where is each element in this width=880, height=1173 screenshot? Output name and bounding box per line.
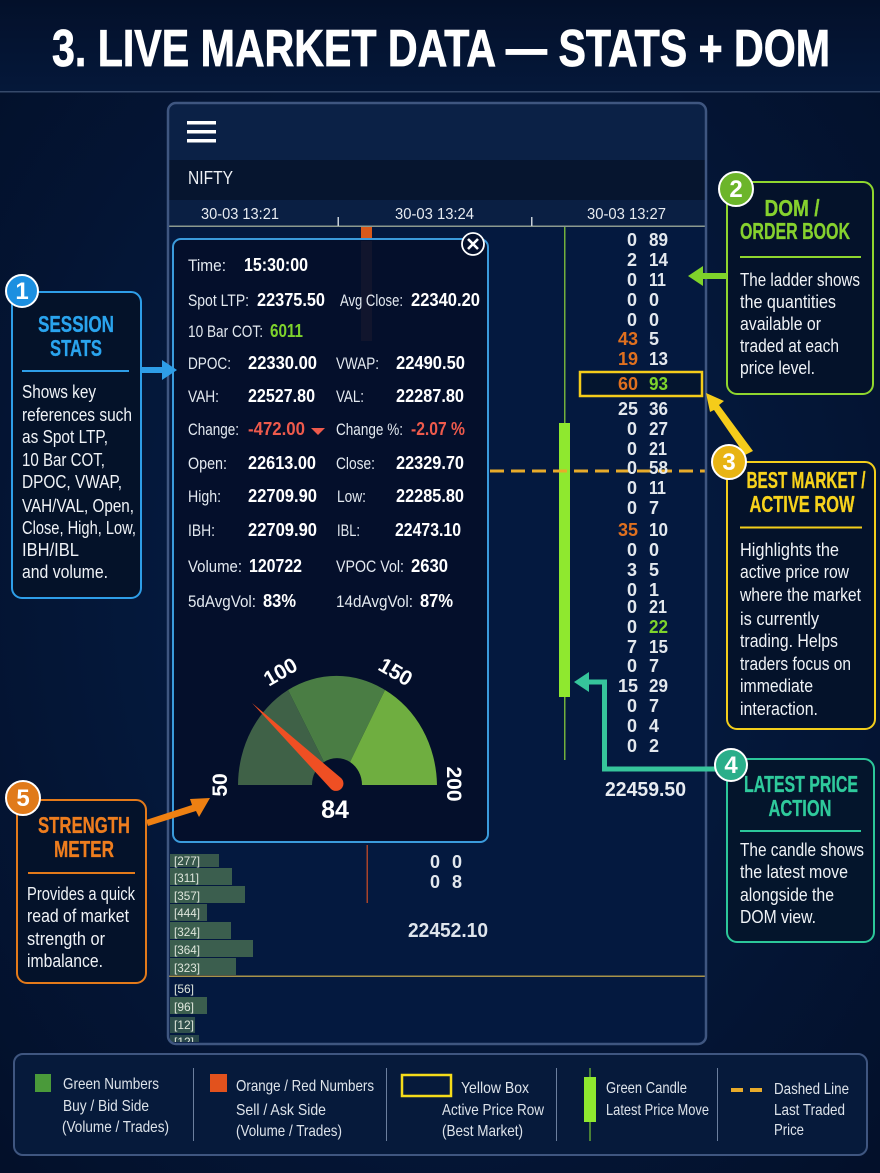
stat rows: Volume: bbox=[188, 557, 242, 576]
lower DOM rows: 0 bbox=[430, 872, 440, 892]
volume bars: [357] bbox=[174, 889, 200, 903]
stat rows: 22375.50 bbox=[257, 290, 325, 310]
body text: is currently bbox=[740, 609, 819, 629]
stat rows: Open: bbox=[188, 454, 227, 473]
needle bbox=[252, 703, 343, 791]
legend: green numbers bbox=[35, 1074, 169, 1136]
callout 3: best market bbox=[727, 462, 875, 729]
DOM ladder: 7 bbox=[649, 696, 659, 716]
DOM ladder: 21 bbox=[649, 597, 667, 617]
body text: Shows key bbox=[22, 382, 96, 402]
DOM ladder: 60 bbox=[618, 374, 638, 394]
DOM ladder: 14 bbox=[649, 250, 668, 270]
gauge labels: 150 bbox=[374, 654, 416, 691]
DOM ladder: 58 bbox=[649, 458, 668, 478]
badge 3: 3 bbox=[722, 449, 736, 476]
DOM ladder: 22 bbox=[649, 617, 668, 637]
DOM ladder: 4 bbox=[649, 716, 659, 736]
volume bars: [323] bbox=[174, 961, 200, 975]
time axis bbox=[169, 200, 705, 227]
stat rows: Change %: bbox=[336, 420, 403, 439]
body text bbox=[740, 840, 864, 927]
body text: imbalance. bbox=[27, 951, 103, 971]
DOM ladder: 3 bbox=[627, 560, 637, 580]
stat rows: 22527.80 bbox=[248, 386, 315, 406]
callout 2: DOM order book bbox=[719, 172, 873, 394]
heading: SESSION bbox=[38, 311, 114, 337]
DOM ladder: 0 bbox=[627, 439, 637, 459]
legend: green numbers: Green Numbers bbox=[63, 1076, 159, 1093]
DOM ladder: 15 bbox=[649, 637, 668, 657]
body text: Provides a quick bbox=[27, 884, 136, 904]
body text: Highlights the bbox=[740, 540, 839, 560]
DOM ladder: 0 bbox=[649, 310, 659, 330]
legend: orange numbers: Orange / Red Numbers bbox=[236, 1078, 374, 1095]
body text: immediate bbox=[740, 676, 813, 696]
DOM ladder: 5 bbox=[649, 560, 659, 580]
DOM ladder: 0 bbox=[627, 478, 637, 498]
legend panel bbox=[14, 1054, 867, 1155]
stat rows: 83% bbox=[263, 591, 296, 611]
legend: dashed line bbox=[731, 1081, 849, 1139]
body text: traders focus on bbox=[740, 654, 851, 674]
callout 1: session stats bbox=[6, 275, 141, 598]
app header bar bbox=[169, 104, 705, 160]
heading bbox=[746, 467, 866, 517]
stat rows: 22285.80 bbox=[396, 486, 464, 506]
DOM ladder: 0 bbox=[627, 540, 637, 560]
badge 5 bbox=[6, 781, 40, 815]
legend: green numbers: (Volume / Trades) bbox=[62, 1119, 169, 1136]
body text: and volume. bbox=[22, 562, 108, 582]
stat rows: 120722 bbox=[249, 556, 302, 576]
stat rows: 22329.70 bbox=[396, 453, 464, 473]
stat rows: -2.07 % bbox=[411, 419, 465, 439]
volume bars: [56] bbox=[174, 982, 194, 996]
body text: The ladder shows bbox=[740, 270, 860, 290]
legend: orange numbers: Sell / Ask Side bbox=[236, 1102, 326, 1119]
lower price: 22452.10 bbox=[408, 920, 488, 942]
body text: price level. bbox=[740, 358, 815, 378]
badge 1: 1 bbox=[15, 278, 29, 305]
stat rows: 22709.90 bbox=[248, 520, 317, 540]
DOM ladder: 0 bbox=[627, 656, 637, 676]
legend: green candle: Green Candle bbox=[606, 1080, 687, 1097]
body text: trading. Helps bbox=[740, 631, 838, 651]
badge 4: 4 bbox=[724, 752, 738, 779]
volume bars: [311] bbox=[174, 871, 199, 885]
badge 2 bbox=[719, 172, 753, 206]
gauge labels: 100 bbox=[260, 654, 302, 691]
body text: VAH/VAL, Open, bbox=[22, 496, 134, 516]
panel: session stats popup bbox=[173, 233, 488, 842]
lower DOM rows: 0 bbox=[430, 852, 440, 872]
panel: app window bbox=[168, 103, 706, 1049]
icon: hamburger menu bbox=[187, 121, 216, 142]
volume bars bbox=[170, 854, 253, 1049]
stat rows: 2630 bbox=[411, 556, 448, 576]
legend: yellow box: Yellow Box bbox=[461, 1080, 529, 1097]
lower DOM rows: 0 bbox=[452, 852, 462, 872]
DOM ladder: 27 bbox=[649, 419, 668, 439]
badge 5: 5 bbox=[16, 785, 30, 812]
stat rows: Low: bbox=[337, 487, 366, 506]
body text: strength or bbox=[27, 929, 105, 949]
DOM ladder: 7 bbox=[649, 498, 659, 518]
body text: the latest move bbox=[740, 862, 848, 882]
callout 5: strength meter bbox=[6, 781, 146, 983]
DOM ladder: 2 bbox=[627, 250, 637, 270]
DOM ladder: 0 bbox=[627, 736, 637, 756]
gauge value: 84 bbox=[321, 796, 349, 824]
badge 1 bbox=[6, 275, 38, 307]
DOM ladder: 21 bbox=[649, 439, 667, 459]
DOM ladder: 89 bbox=[649, 230, 668, 250]
gauge labels bbox=[209, 654, 465, 802]
DOM ladder: 7 bbox=[627, 637, 637, 657]
DOM ladder: 10 bbox=[649, 520, 668, 540]
lower DOM rows bbox=[430, 852, 462, 892]
stat rows: 22490.50 bbox=[396, 353, 465, 373]
DOM ladder: 0 bbox=[627, 580, 637, 600]
badge 3 bbox=[712, 445, 746, 479]
lower red wick bbox=[366, 845, 368, 903]
DOM ladder: 29 bbox=[649, 676, 668, 696]
DOM ladder: 15 bbox=[618, 676, 638, 696]
legend: dashed line: Last Traded bbox=[774, 1102, 845, 1119]
stat rows: 22613.00 bbox=[248, 453, 316, 473]
stat rows: 5dAvgVol: bbox=[188, 592, 256, 611]
body text: read of market bbox=[27, 906, 129, 926]
body text: IBH/IBL bbox=[22, 540, 79, 560]
stat rows: 22473.10 bbox=[395, 520, 461, 540]
badge 2: 2 bbox=[729, 176, 743, 203]
legend: orange numbers bbox=[210, 1074, 374, 1140]
body text bbox=[27, 884, 136, 971]
legend: yellow box: (Best Market) bbox=[442, 1123, 523, 1140]
body text: DPOC, VWAP, bbox=[22, 472, 122, 492]
heading bbox=[38, 311, 114, 361]
gauge labels: 50 bbox=[209, 773, 232, 797]
volume bars: [96] bbox=[174, 1000, 194, 1014]
heading: STRENGTH bbox=[38, 812, 130, 838]
legend: yellow box: Active Price Row bbox=[442, 1102, 544, 1119]
body text: DOM view. bbox=[740, 907, 816, 927]
body text: 10 Bar COT, bbox=[22, 450, 105, 470]
arrow: strength meter to gauge bbox=[146, 798, 210, 826]
body text: alongside the bbox=[740, 885, 834, 905]
DOM ladder: 7 bbox=[649, 656, 659, 676]
heading bbox=[38, 812, 130, 862]
stat rows: Change: bbox=[188, 420, 239, 439]
DOM ladder: 0 bbox=[627, 696, 637, 716]
volume bars: [12] bbox=[174, 1018, 194, 1032]
DOM ladder bbox=[580, 230, 702, 756]
volume bars: [444] bbox=[174, 906, 200, 920]
stat rows: -472.00 bbox=[248, 419, 305, 439]
DOM ladder: 25 bbox=[618, 399, 638, 419]
arrow: DOM callout to ladder bbox=[688, 266, 727, 286]
stat rows: DPOC: bbox=[188, 354, 231, 373]
legend: dashed line: Price bbox=[774, 1122, 804, 1139]
DOM ladder: 0 bbox=[627, 230, 637, 250]
arrow: best market to active row bbox=[706, 393, 753, 455]
DOM footer price: 22459.50 bbox=[605, 779, 686, 801]
stat rows: 22330.00 bbox=[248, 353, 317, 373]
DOM ladder: 11 bbox=[649, 270, 666, 290]
body text: active price row bbox=[740, 562, 850, 582]
symbol name: NIFTY bbox=[188, 168, 233, 188]
stat rows: Avg Close: bbox=[340, 291, 403, 310]
DOM ladder: 93 bbox=[649, 374, 668, 394]
heading: DOM / bbox=[764, 195, 820, 221]
DOM ladder: 35 bbox=[618, 520, 638, 540]
arrow: session stats to popup bbox=[141, 360, 177, 380]
volume bars: [12] bbox=[174, 1035, 194, 1049]
DOM ladder: 0 bbox=[649, 290, 659, 310]
DOM ladder: 19 bbox=[618, 349, 638, 369]
time axis: 30-03 13:27 bbox=[587, 206, 666, 223]
DOM ladder: 0 bbox=[627, 458, 637, 478]
time axis: 30-03 13:21 bbox=[201, 206, 279, 223]
DOM ladder: 36 bbox=[649, 399, 668, 419]
DOM ladder: 11 bbox=[649, 478, 666, 498]
DOM ladder: 0 bbox=[627, 498, 637, 518]
DOM ladder: 0 bbox=[627, 310, 637, 330]
heading: METER bbox=[54, 836, 114, 862]
body text: the quantities bbox=[740, 292, 836, 312]
stat rows: 6011 bbox=[270, 321, 303, 341]
active row yellow box bbox=[580, 372, 702, 396]
legend: green numbers: Buy / Bid Side bbox=[63, 1098, 149, 1115]
time axis: 30-03 13:24 bbox=[395, 206, 474, 223]
DOM ladder: 0 bbox=[627, 716, 637, 736]
icon: down triangle bbox=[311, 428, 325, 435]
DOM ladder: 0 bbox=[627, 290, 637, 310]
body text: where the market bbox=[739, 585, 861, 605]
body text: traded at each bbox=[740, 336, 839, 356]
stat rows: VPOC Vol: bbox=[336, 557, 404, 576]
callout 4: latest price action bbox=[727, 759, 874, 942]
heading: STATS bbox=[50, 335, 102, 361]
DOM ladder: 5 bbox=[649, 329, 659, 349]
body text bbox=[740, 270, 860, 378]
DOM ladder: 0 bbox=[627, 617, 637, 637]
DOM ladder: 1 bbox=[649, 580, 659, 600]
body text bbox=[739, 540, 861, 719]
stat rows: VAL: bbox=[336, 387, 364, 406]
symbol strip bbox=[169, 160, 705, 200]
DOM ladder: 13 bbox=[649, 349, 668, 369]
DOM ladder: 2 bbox=[649, 736, 659, 756]
DOM ladder: 43 bbox=[618, 329, 638, 349]
legend: dashed line: Dashed Line bbox=[774, 1081, 849, 1098]
stat rows: VWAP: bbox=[336, 354, 379, 373]
stat rows: 14dAvgVol: bbox=[336, 592, 413, 611]
heading bbox=[744, 771, 858, 821]
strength gauge bbox=[209, 654, 465, 824]
dashed last traded price line bbox=[490, 470, 705, 472]
stat rows bbox=[188, 255, 480, 611]
heading: ACTION bbox=[768, 795, 832, 821]
stat rows: Spot LTP: bbox=[188, 291, 249, 310]
stat rows: 87% bbox=[420, 591, 453, 611]
stat rows: 22340.20 bbox=[411, 290, 480, 310]
arrow: latest price to candle bbox=[574, 672, 716, 772]
body text: available or bbox=[740, 314, 821, 334]
stat rows: IBH: bbox=[188, 521, 215, 540]
legend: orange numbers: (Volume / Trades) bbox=[236, 1123, 342, 1140]
stat rows: 15:30:00 bbox=[244, 255, 308, 275]
DOM ladder: 0 bbox=[627, 597, 637, 617]
body text: references such bbox=[22, 405, 132, 425]
volume bars: [277] bbox=[174, 854, 200, 868]
stat rows: Close: bbox=[336, 454, 375, 473]
badge 4 bbox=[715, 749, 747, 781]
DOM ladder: 0 bbox=[627, 270, 637, 290]
orange candle marker bbox=[361, 227, 372, 240]
body text: interaction. bbox=[740, 699, 818, 719]
gold price line bbox=[169, 976, 705, 977]
stat rows: IBL: bbox=[337, 521, 360, 540]
heading bbox=[740, 195, 850, 244]
DOM ladder: 0 bbox=[649, 540, 659, 560]
body text bbox=[22, 382, 136, 582]
stat rows: Time: bbox=[188, 256, 226, 275]
latest candle bbox=[559, 227, 570, 760]
DOM ladder: 0 bbox=[627, 419, 637, 439]
body text: as Spot LTP, bbox=[22, 427, 108, 447]
body text: Close, High, Low, bbox=[22, 518, 136, 538]
lower DOM rows: 8 bbox=[452, 872, 462, 892]
icon: close button bbox=[462, 233, 484, 255]
legend: yellow box bbox=[402, 1075, 544, 1140]
stat rows: VAH: bbox=[188, 387, 219, 406]
volume bars: [364] bbox=[174, 943, 200, 957]
stat rows: High: bbox=[188, 487, 221, 506]
stat rows: 22287.80 bbox=[396, 386, 464, 406]
legend: green candle bbox=[584, 1068, 709, 1141]
legend: green candle: Latest Price Move bbox=[606, 1102, 709, 1119]
stat rows: 10 Bar COT: bbox=[188, 322, 263, 341]
stat rows: 22709.90 bbox=[248, 486, 317, 506]
volume bars: [324] bbox=[174, 925, 200, 939]
gauge labels: 200 bbox=[442, 766, 465, 802]
